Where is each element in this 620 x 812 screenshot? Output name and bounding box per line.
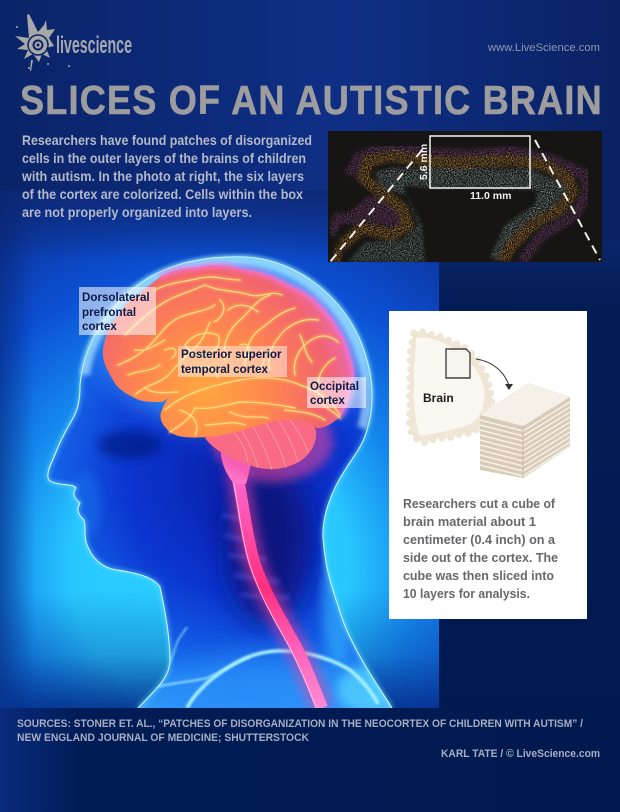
logo: LiveScience [15, 14, 132, 71]
intro text: Researchers have found patches of disorganized [22, 133, 312, 148]
label: occipital cortex: Occipital [310, 380, 359, 393]
footer band [0, 708, 620, 812]
icon: splat atom [15, 14, 70, 71]
cut square [446, 349, 470, 378]
label: occipital cortex [307, 377, 366, 408]
sources: NEW ENGLAND JOURNAL OF MEDICINE; SHUTTERSTOCK [17, 732, 310, 744]
label: dorsolateral prefrontal cortex: Dorsolateral [82, 291, 150, 304]
panel: brain slicing diagram [389, 311, 587, 619]
label: dorsolateral prefrontal cortex: prefrontal [82, 306, 136, 319]
brain gyri [118, 277, 340, 435]
skull shell glow [85, 261, 367, 428]
credit: KARL TATE / © LiveScience.com [441, 748, 600, 760]
intro text: cells in the outer layers of the brains of children [22, 151, 306, 166]
micrograph cell layers [330, 146, 588, 262]
head x-ray illustration [0, 190, 439, 733]
label: dorsolateral prefrontal cortex: cortex [82, 320, 117, 333]
brain label: Brain [423, 391, 454, 405]
head interior shading [74, 262, 390, 708]
logo wordmark: livescience [56, 32, 132, 59]
measurement box [430, 136, 530, 188]
slicing description: 10 layers for analysis. [403, 586, 530, 601]
intro text: are not properly organized into layers. [22, 205, 252, 220]
website url: www.LiveScience.com [487, 42, 600, 54]
head silhouette [48, 257, 392, 708]
brainstem [220, 452, 250, 484]
label: posterior superior temporal cortex [178, 346, 287, 377]
slicing description: Researchers cut a cube of [403, 496, 556, 511]
slicing description [403, 496, 558, 601]
dashed guide lines [330, 140, 600, 262]
label: occipital cortex: cortex [310, 394, 345, 407]
head outline [48, 257, 392, 708]
slicing description: centimeter (0.4 inch) on a [403, 532, 556, 547]
collarbone glow [187, 651, 378, 708]
label: dorsolateral prefrontal cortex [79, 287, 156, 335]
label: posterior superior temporal cortex: Posterior superior [181, 348, 282, 361]
box width label: 11.0 mm [470, 190, 511, 202]
box height label: 5.6 mm [418, 144, 430, 180]
sliced stack [480, 383, 570, 478]
intro text: of the cortex are colorized. Cells within the box [22, 187, 303, 202]
intro text: with autism. In the photo at right, the six layers [21, 169, 304, 184]
cortex micrograph [328, 131, 602, 262]
label: posterior superior temporal cortex: temporal cortex [181, 363, 269, 376]
title: SLICES OF AN AUTISTIC BRAIN [20, 78, 602, 124]
vertebrae [222, 515, 290, 598]
slicing description: brain material about 1 [403, 514, 536, 529]
intro text [21, 133, 312, 220]
brain [103, 265, 354, 437]
brain tissue block [409, 332, 492, 442]
slicing description: side out of the cortex. The [403, 550, 558, 565]
spinal cord [231, 470, 322, 708]
cerebellum [205, 402, 333, 482]
sources [17, 718, 584, 744]
arrow [476, 359, 513, 390]
slicing description: cube was then sliced into [403, 568, 554, 583]
